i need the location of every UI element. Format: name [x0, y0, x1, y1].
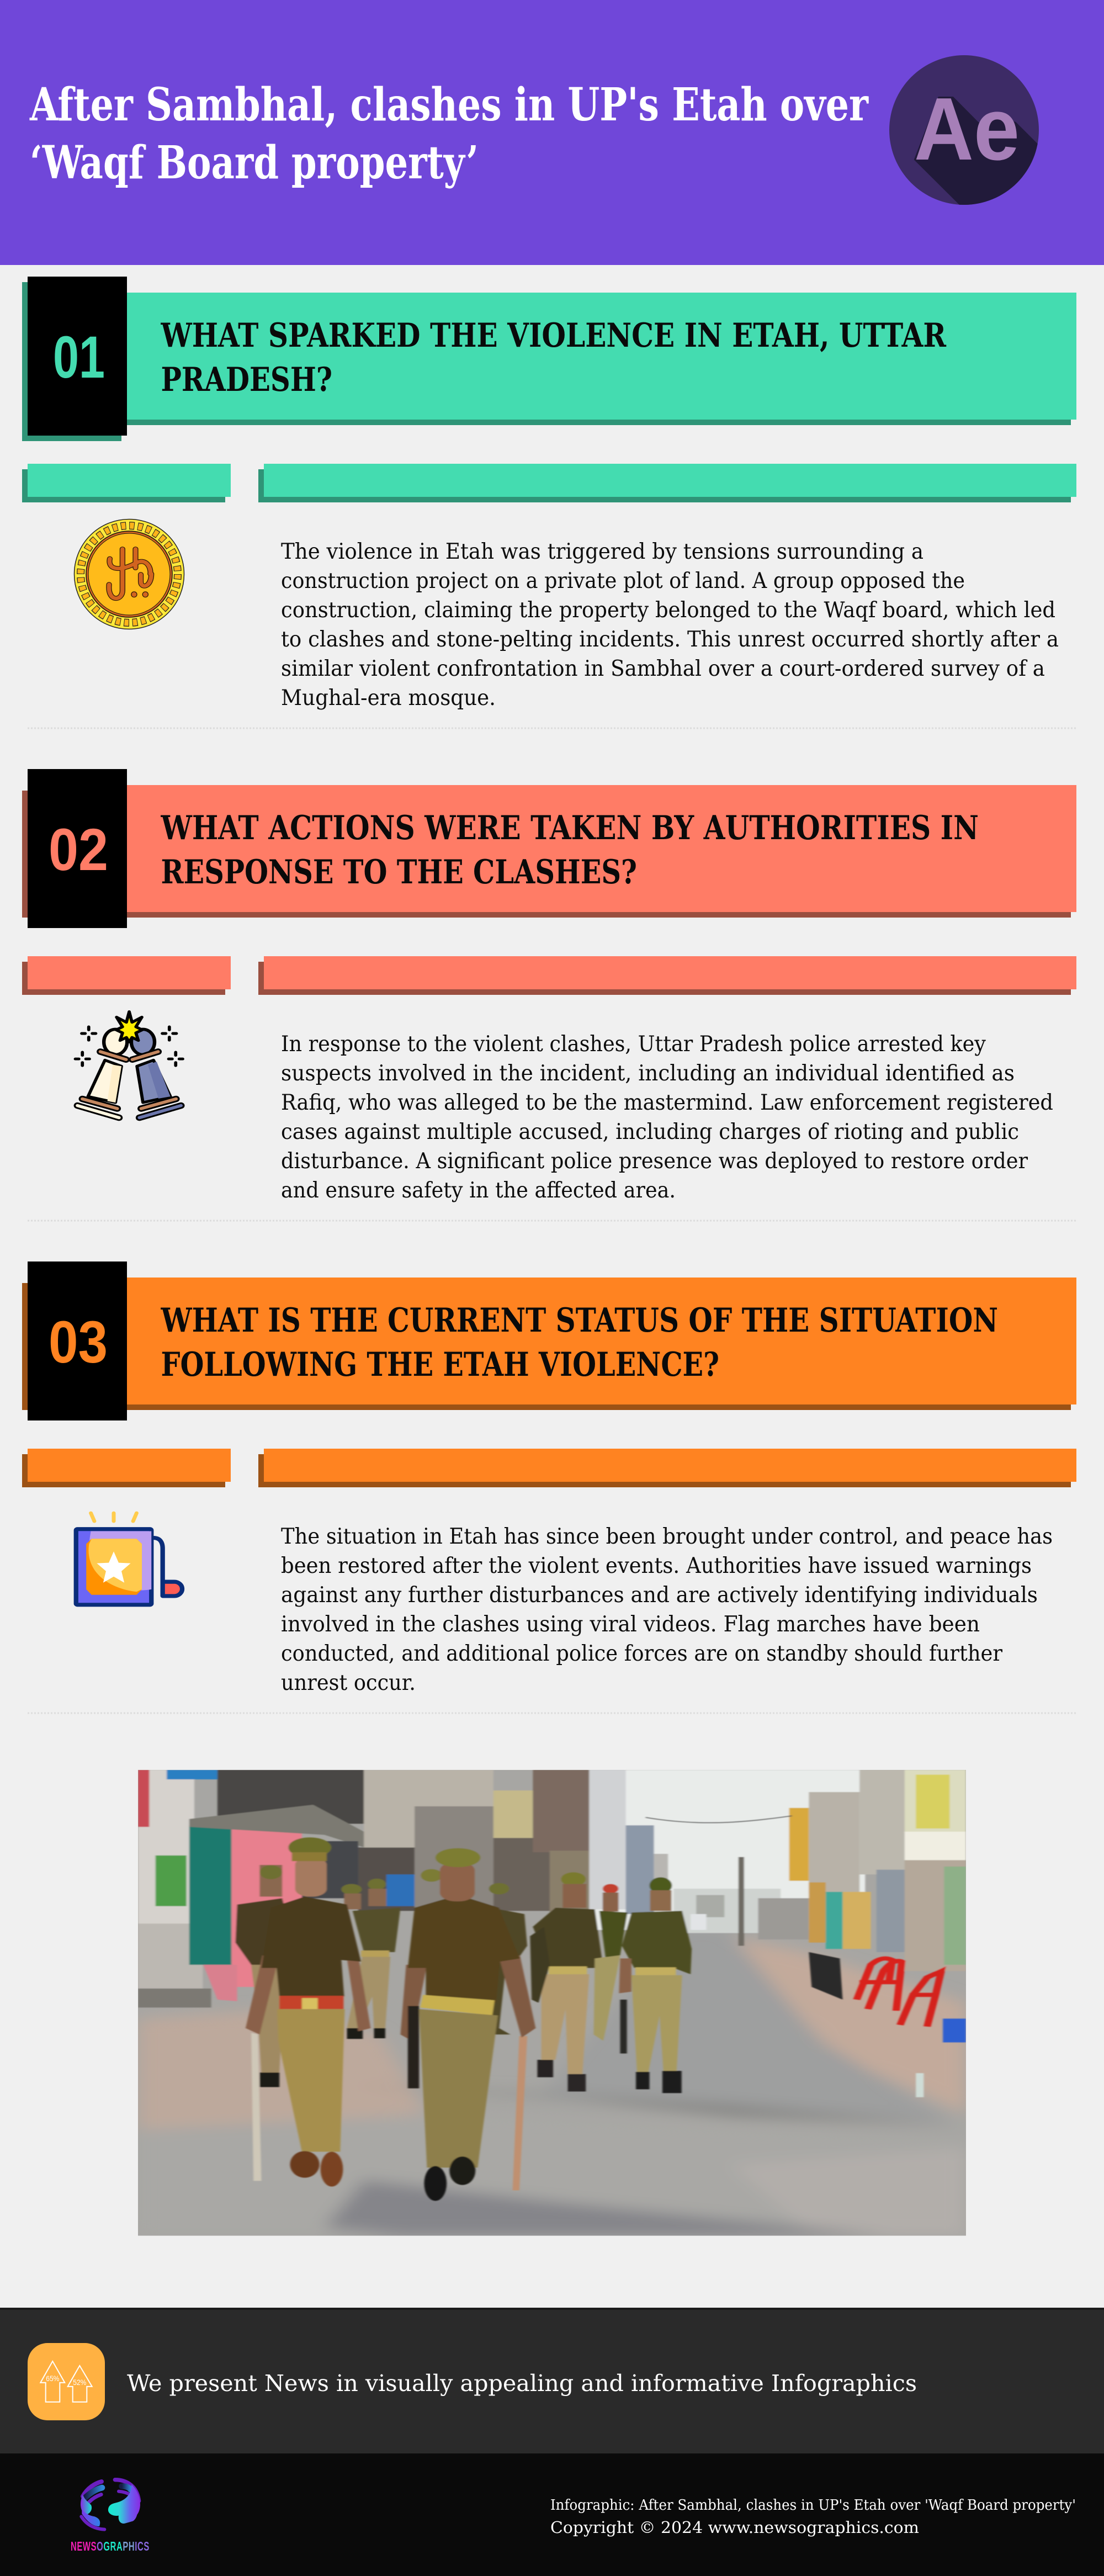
heading banner 3: FOLLOWING THE ETAH VIOLENCE?	[161, 1345, 719, 1384]
icon: Ae badge: Ae	[914, 79, 1020, 179]
title	[29, 78, 869, 189]
heading banner 3	[22, 1262, 1076, 1420]
text block 3: against any further disturbances and are actively identifying individuals	[281, 1583, 1038, 1608]
title: ‘Waqf Board property’	[30, 136, 479, 189]
text block 3: conducted, and additional police forces are on standby should further	[281, 1641, 1002, 1666]
icon: percentage arrows: 52%	[73, 2378, 86, 2387]
panel: section 3	[22, 1262, 1076, 1713]
text block 1	[281, 539, 1059, 711]
credit text: Copyright © 2024 www.newsographics.com	[550, 2518, 919, 2537]
text block 1: to clashes and stone-pelting incidents. This unrest occurred shortly after a	[281, 627, 1059, 652]
text block 2: cases against multiple accused, including charges of rioting and public	[281, 1120, 1019, 1144]
right buildings	[789, 1808, 809, 1881]
text block 2: disturbance. A significant police presence was deployed to restore order	[281, 1149, 1028, 1174]
heading banner 1: 01	[53, 324, 105, 390]
title: After Sambhal, clashes in UP's Etah over	[29, 78, 869, 131]
credit text	[550, 2497, 1076, 2537]
text block 3	[281, 1524, 1053, 1695]
icon: rupee coin	[74, 519, 184, 629]
sub bars 3	[22, 1449, 1076, 1487]
logo: NewsoGraphics	[71, 2480, 150, 2553]
heading banner 1	[22, 277, 1076, 441]
officer B	[401, 1848, 535, 2201]
icon: Ae badge	[889, 55, 1043, 206]
back row officers	[236, 1865, 527, 2087]
text block 2: and ensure safety in the affected area.	[281, 1178, 676, 1203]
heading banner 3: 03	[49, 1308, 108, 1375]
tagline text: We present News in visually appealing and informative Infographics	[127, 2370, 917, 2397]
icon: star mug	[76, 1513, 182, 1605]
panel: section 1	[22, 277, 1076, 728]
officer C	[530, 1872, 628, 2091]
text block 2: suspects involved in the incident, including an individual identified as	[281, 1061, 1015, 1086]
officer D	[619, 1877, 692, 2093]
heading banner 1: WHAT SPARKED THE VIOLENCE IN ETAH, UTTAR	[161, 316, 947, 355]
icon: clashing chess pieces	[75, 1012, 183, 1117]
text block 3: unrest occur.	[281, 1671, 416, 1695]
heading banner 2: 02	[49, 816, 108, 883]
motorbike and chairs	[809, 1952, 843, 2000]
left buildings	[138, 1770, 194, 1992]
text block 2: In response to the violent clashes, Uttar Pradesh police arrested key	[281, 1032, 986, 1057]
heading banner 2	[22, 769, 1076, 928]
header band	[0, 0, 1104, 265]
logo: NewsoGraphics: NEWSOGRAPHICS	[71, 2539, 150, 2553]
photo: police patrol on street	[138, 1770, 966, 2236]
panel: section 2	[22, 769, 1076, 1221]
text block 3: The situation in Etah has since been brought under control, and peace has	[281, 1524, 1053, 1549]
icon: percentage arrows: 65%	[46, 2374, 59, 2383]
text block 1: similar violent confrontation in Sambhal over a court-ordered survey of a	[281, 656, 1045, 681]
text block 2	[281, 1032, 1053, 1203]
icon: percentage arrows	[28, 2343, 105, 2420]
credit text: Infographic: After Sambhal, clashes in UP's Etah over 'Waqf Board property'	[550, 2497, 1076, 2514]
sub bars 1	[22, 464, 1076, 502]
heading banner 2: RESPONSE TO THE CLASHES?	[161, 853, 637, 892]
text block 1: The violence in Etah was triggered by tensions surrounding a	[281, 539, 923, 564]
text block 3: been restored after the violent events. Authorities have issued warnings	[281, 1554, 1032, 1578]
text block 1: construction, claiming the property belonged to the Waqf board, which led	[281, 598, 1055, 623]
text block 3: involved in the clashes using viral videos. Flag marches have been	[281, 1612, 980, 1637]
sub bars 2	[22, 956, 1076, 995]
footer band: credits	[0, 2453, 1104, 2576]
text block 1: construction project on a private plot of land. A group opposed the	[281, 569, 965, 593]
officer A	[246, 1837, 370, 2187]
footer band: tagline	[0, 2308, 1104, 2453]
text block 2: Rafiq, who was alleged to be the mastermind. Law enforcement registered	[281, 1090, 1053, 1115]
heading banner 1: PRADESH?	[161, 361, 332, 399]
text block 1: Mughal-era mosque.	[281, 686, 496, 711]
